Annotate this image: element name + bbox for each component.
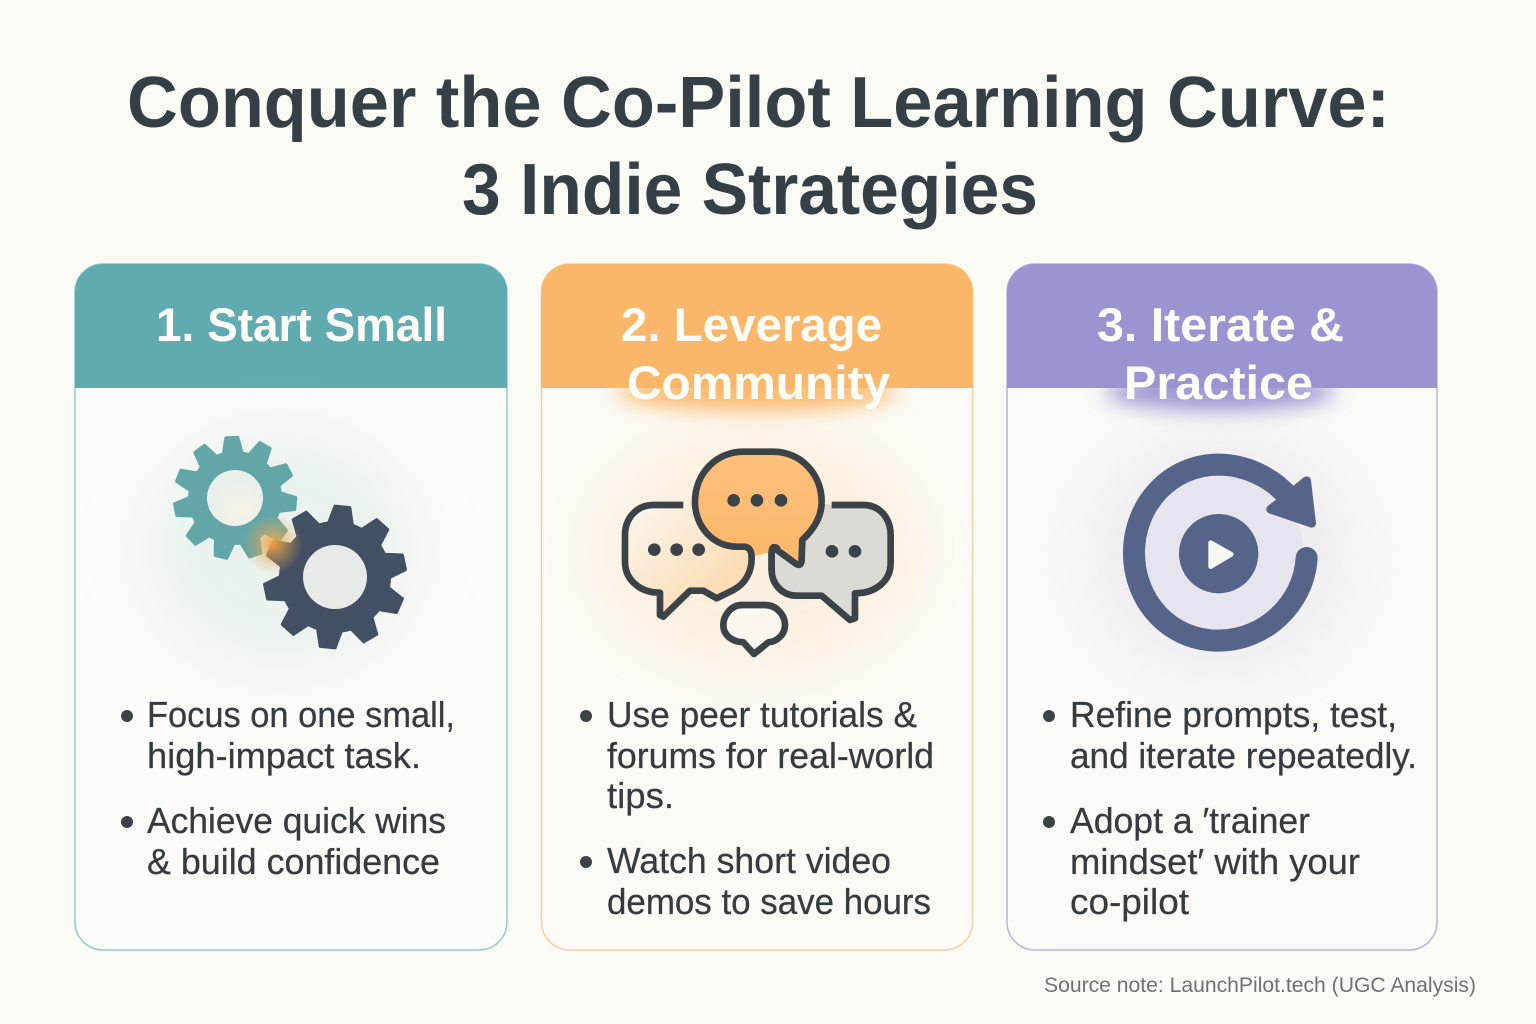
heading: iterate and practice: 3. Iterate & [1097, 298, 1344, 351]
bullets: leverage community: forums for real-world [607, 735, 934, 776]
icon: replay with play button [1133, 465, 1312, 641]
header band: leverage community [541, 264, 973, 388]
header band: iterate and practice [1007, 264, 1437, 388]
bullets: leverage community [580, 694, 934, 922]
bullets: start small [121, 694, 455, 882]
bullets: leverage community: Watch short video [607, 840, 891, 881]
icon: chat bubbles [625, 452, 891, 654]
header glow [1105, 374, 1335, 410]
panel: leverage community [541, 264, 973, 950]
heading: leverage community [621, 298, 890, 409]
heading: leverage community: 2. Leverage [621, 298, 882, 351]
bullets: iterate and practice: mindset′ with your [1070, 841, 1360, 882]
bullets: iterate and practice: Refine prompts, test, [1070, 694, 1397, 735]
title: Conquer the Co-Pilot Learning Curve: [127, 63, 1390, 143]
heading: start small: 1. Start Small [156, 298, 447, 351]
heading: leverage community: Community [627, 356, 890, 409]
bullets: start small: high-impact task. [147, 735, 421, 776]
bullets: iterate and practice: Adopt a ′trainer [1070, 800, 1310, 841]
source note: Source note: LaunchPilot.tech (UGC Analysis) [1044, 974, 1476, 997]
soft icon glow [592, 425, 922, 675]
bullets: leverage community: demos to save hours [607, 881, 931, 922]
bullets: leverage community: tips. [607, 775, 674, 816]
heading: iterate and practice: Practice [1124, 356, 1313, 409]
bullets: iterate and practice: co-pilot [1070, 881, 1189, 922]
bullets: start small: & build confidence [147, 841, 440, 882]
panel: start small [75, 264, 507, 950]
heading: iterate and practice [1097, 298, 1344, 409]
title: 3 Indie Strategies [462, 150, 1038, 230]
bullets: iterate and practice: and iterate repeatedly. [1070, 735, 1417, 776]
bullets: start small: Achieve quick wins [147, 800, 446, 841]
title [127, 63, 1390, 230]
header glow [617, 374, 897, 410]
bullets: iterate and practice [1043, 694, 1417, 922]
header band: start small [75, 264, 507, 388]
bullets: start small: Focus on one small, [147, 694, 455, 735]
soft icon glow [1080, 425, 1360, 685]
bullets: leverage community: Use peer tutorials & [607, 694, 917, 735]
icon: gears [145, 430, 415, 670]
panel: iterate and practice [1007, 264, 1437, 950]
